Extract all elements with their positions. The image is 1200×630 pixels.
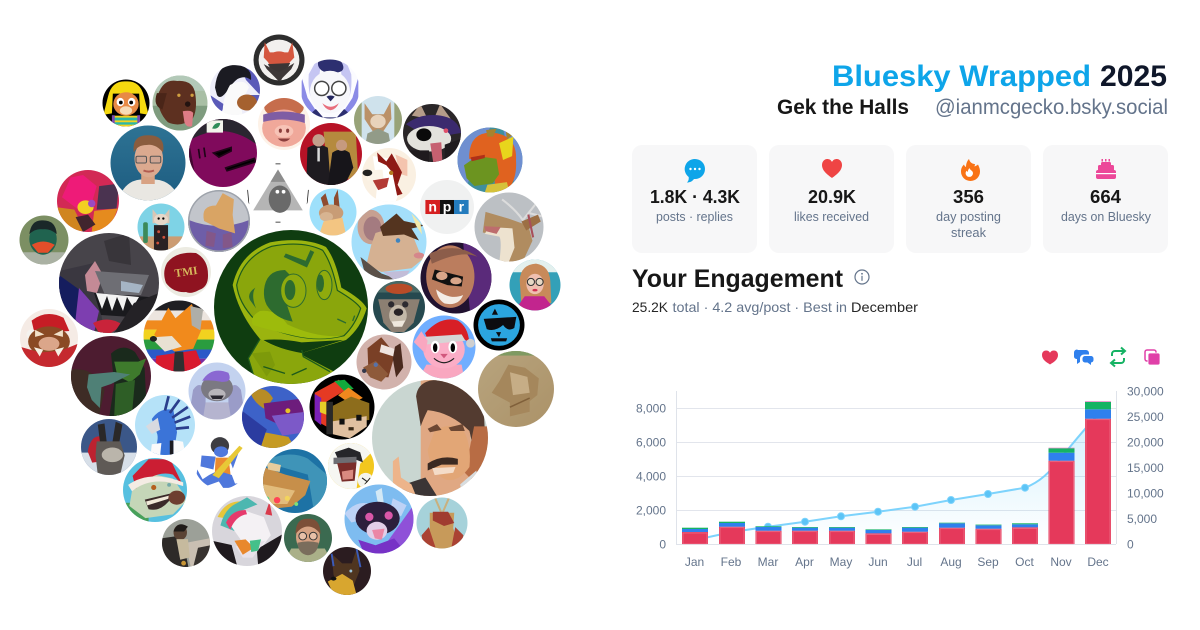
display name: Gek the Halls bbox=[777, 96, 909, 119]
left axis labels: 2,000 bbox=[636, 504, 666, 518]
avatar: llama bbox=[310, 188, 356, 236]
avatar: fox in bandana ring bbox=[254, 34, 304, 86]
avatar: blue feathered bird bbox=[135, 395, 195, 455]
month labels: Jul bbox=[907, 555, 922, 569]
avatar: minecraft head bbox=[310, 374, 374, 440]
month labels: Mar bbox=[758, 555, 778, 569]
grid lines bbox=[676, 408, 1116, 510]
right axis labels: 25,000 bbox=[1127, 410, 1164, 424]
heading: Your Engagement: Your Engagement bbox=[632, 265, 844, 293]
avatar: bearded man bbox=[284, 514, 332, 562]
stat card: day posting streak bbox=[906, 145, 1031, 253]
avatar: TMI wax seal: TMI bbox=[174, 265, 199, 280]
cumulative area bbox=[695, 415, 1098, 544]
avatar: orange dragon with lights bbox=[263, 449, 327, 513]
gecko avatar (largest) bbox=[214, 230, 368, 384]
avatar: latte art bbox=[478, 351, 554, 427]
engagement summary: total · 4.2 avg/post · Best in bbox=[672, 299, 847, 315]
icon: flame bbox=[961, 159, 980, 181]
right axis labels: 0 bbox=[1127, 538, 1134, 552]
line markers bbox=[764, 484, 1028, 530]
avatar: fox rainbow flag bbox=[144, 300, 214, 372]
right axis labels: 10,000 bbox=[1127, 486, 1164, 500]
icon: chat bubble bbox=[685, 159, 705, 182]
avatar: gray bat with sunglasses bbox=[59, 233, 159, 333]
avatar: lynx bbox=[354, 96, 402, 144]
avatar: green woman bbox=[71, 336, 151, 416]
engagement summary: December bbox=[851, 299, 918, 315]
month labels: Jun bbox=[868, 555, 888, 569]
chart legend icons bbox=[1042, 348, 1160, 366]
month labels: Apr bbox=[795, 555, 814, 569]
avatar: capsule bbox=[188, 190, 250, 252]
stat card: likes received: likes received bbox=[794, 210, 869, 224]
right axis labels: 5,000 bbox=[1127, 512, 1157, 526]
avatar: smiling man with glasses bbox=[420, 242, 492, 314]
avatar: illuminati triangle bbox=[247, 162, 309, 224]
icon: birthday cake bbox=[1096, 159, 1116, 179]
avatar: pink spiky dragon bbox=[57, 170, 119, 232]
avatar: sunglasses skull bbox=[474, 300, 524, 350]
avatar: hyena bbox=[373, 281, 425, 333]
avatar: TMI wax seal bbox=[161, 247, 211, 297]
avatar: rainbow unicorn bbox=[212, 496, 282, 566]
stat card: likes received bbox=[769, 145, 894, 253]
month labels: Sep bbox=[977, 555, 999, 569]
avatar: green dragon with red hair bbox=[458, 128, 522, 192]
month labels: May bbox=[830, 555, 852, 569]
legend: likes bbox=[1042, 350, 1058, 364]
avatar: couple on red throne bbox=[300, 123, 362, 185]
avatar: girl with glasses bbox=[510, 260, 560, 310]
legend: reposts bbox=[1111, 348, 1125, 366]
title: Bluesky Wrapped 2025: Bluesky Wrapped bbox=[832, 60, 1091, 93]
left axis labels bbox=[636, 402, 666, 552]
month labels: Aug bbox=[940, 555, 962, 569]
stat card: posts and replies: 1.8K · 4.3K bbox=[650, 186, 741, 207]
month labels: Oct bbox=[1015, 555, 1034, 569]
icon: info bbox=[855, 270, 869, 284]
stat card: days on Bluesky: 664 bbox=[1090, 186, 1122, 207]
avatar: pig with curly hair bbox=[258, 97, 310, 150]
avatar: pink leopard santa bbox=[412, 316, 476, 378]
bar inner highlights bbox=[683, 420, 1110, 544]
avatar: green person with duck bill bbox=[20, 216, 68, 264]
month labels: Jan bbox=[685, 555, 704, 569]
combo chart: monthly engagement bars and cumulative line bbox=[636, 384, 1164, 569]
left axis labels: 0 bbox=[659, 538, 666, 552]
stat card: posts and replies: posts · replies bbox=[656, 210, 733, 224]
avatar: desert cat bbox=[138, 204, 184, 250]
right axis labels bbox=[1127, 384, 1164, 552]
legend: replies bbox=[1074, 350, 1094, 365]
avatar: howling reindeer bbox=[474, 192, 544, 262]
avatar: yellow-haired cat bbox=[102, 80, 150, 127]
avatar: blue dragon guitarist bbox=[196, 437, 242, 488]
stat card: days on Bluesky: days on Bluesky bbox=[1061, 210, 1152, 224]
engagement summary bbox=[632, 299, 918, 315]
left axis labels: 6,000 bbox=[636, 436, 666, 450]
legend: quotes bbox=[1145, 350, 1160, 365]
avatar: husky with glasses bbox=[300, 58, 360, 118]
avatar: purple furry with horn bbox=[344, 484, 414, 554]
avatar: NPR logo: p bbox=[443, 198, 451, 214]
avatar: brown fox girl bbox=[356, 334, 412, 390]
stat card: likes received: 20.9K bbox=[808, 186, 857, 207]
avatar: brown wolf bbox=[323, 547, 371, 595]
avatar: christmas white wolf bbox=[123, 458, 187, 522]
month labels: Feb bbox=[721, 555, 742, 569]
engagement summary: 25.2K bbox=[632, 299, 669, 315]
avatar: purple dragon bbox=[242, 386, 304, 448]
month labels bbox=[685, 555, 1109, 569]
stat card: day posting streak: 356 bbox=[953, 186, 984, 207]
month labels: Dec bbox=[1087, 555, 1109, 569]
avatar: purple character with cap bbox=[189, 119, 257, 187]
avatar: antlered creature bbox=[416, 498, 468, 548]
avatar: dark raccoon dog fursuit bbox=[403, 104, 461, 162]
left axis labels: 8,000 bbox=[636, 402, 666, 416]
avatar: gray rabbit with santa hat bbox=[81, 419, 137, 475]
stat card: posts and replies bbox=[632, 145, 757, 253]
avatar: glasses man bbox=[110, 126, 186, 200]
right axis labels: 15,000 bbox=[1127, 461, 1164, 475]
icon: heart bbox=[822, 159, 842, 178]
stacked bars bbox=[682, 401, 1111, 544]
left axis labels: 4,000 bbox=[636, 470, 666, 484]
avatar: red and white dog bbox=[362, 148, 416, 202]
avatar: brown dog bbox=[152, 76, 208, 130]
avatar: NPR logo: r bbox=[459, 198, 465, 214]
avatar: purple-haired gray bear bbox=[188, 362, 246, 420]
stat card: day posting streak: day posting bbox=[936, 210, 1001, 224]
avatar: NPR logo bbox=[420, 180, 474, 234]
right axis labels: 20,000 bbox=[1127, 436, 1164, 450]
avatar: Alex Trebek bbox=[372, 380, 488, 496]
stat card: days on Bluesky bbox=[1043, 145, 1168, 253]
handle: @ianmcgecko.bsky.social bbox=[935, 96, 1168, 119]
avatar: boar santa bbox=[20, 309, 78, 367]
avatar: black and white cat bbox=[210, 65, 260, 115]
avatar: dark-clothed man bbox=[162, 519, 210, 567]
month labels: Nov bbox=[1050, 555, 1072, 569]
stat card: day posting streak: streak bbox=[951, 226, 987, 240]
title: Bluesky Wrapped 2025: 2025 bbox=[1100, 60, 1167, 93]
avatar: badger bbox=[328, 443, 374, 489]
avatar: NPR logo: n bbox=[428, 198, 437, 214]
avatar: mouse man bbox=[352, 204, 426, 280]
avatar cluster bbox=[20, 34, 560, 595]
cumulative line bbox=[695, 415, 1098, 540]
right axis labels: 30,000 bbox=[1127, 384, 1164, 398]
